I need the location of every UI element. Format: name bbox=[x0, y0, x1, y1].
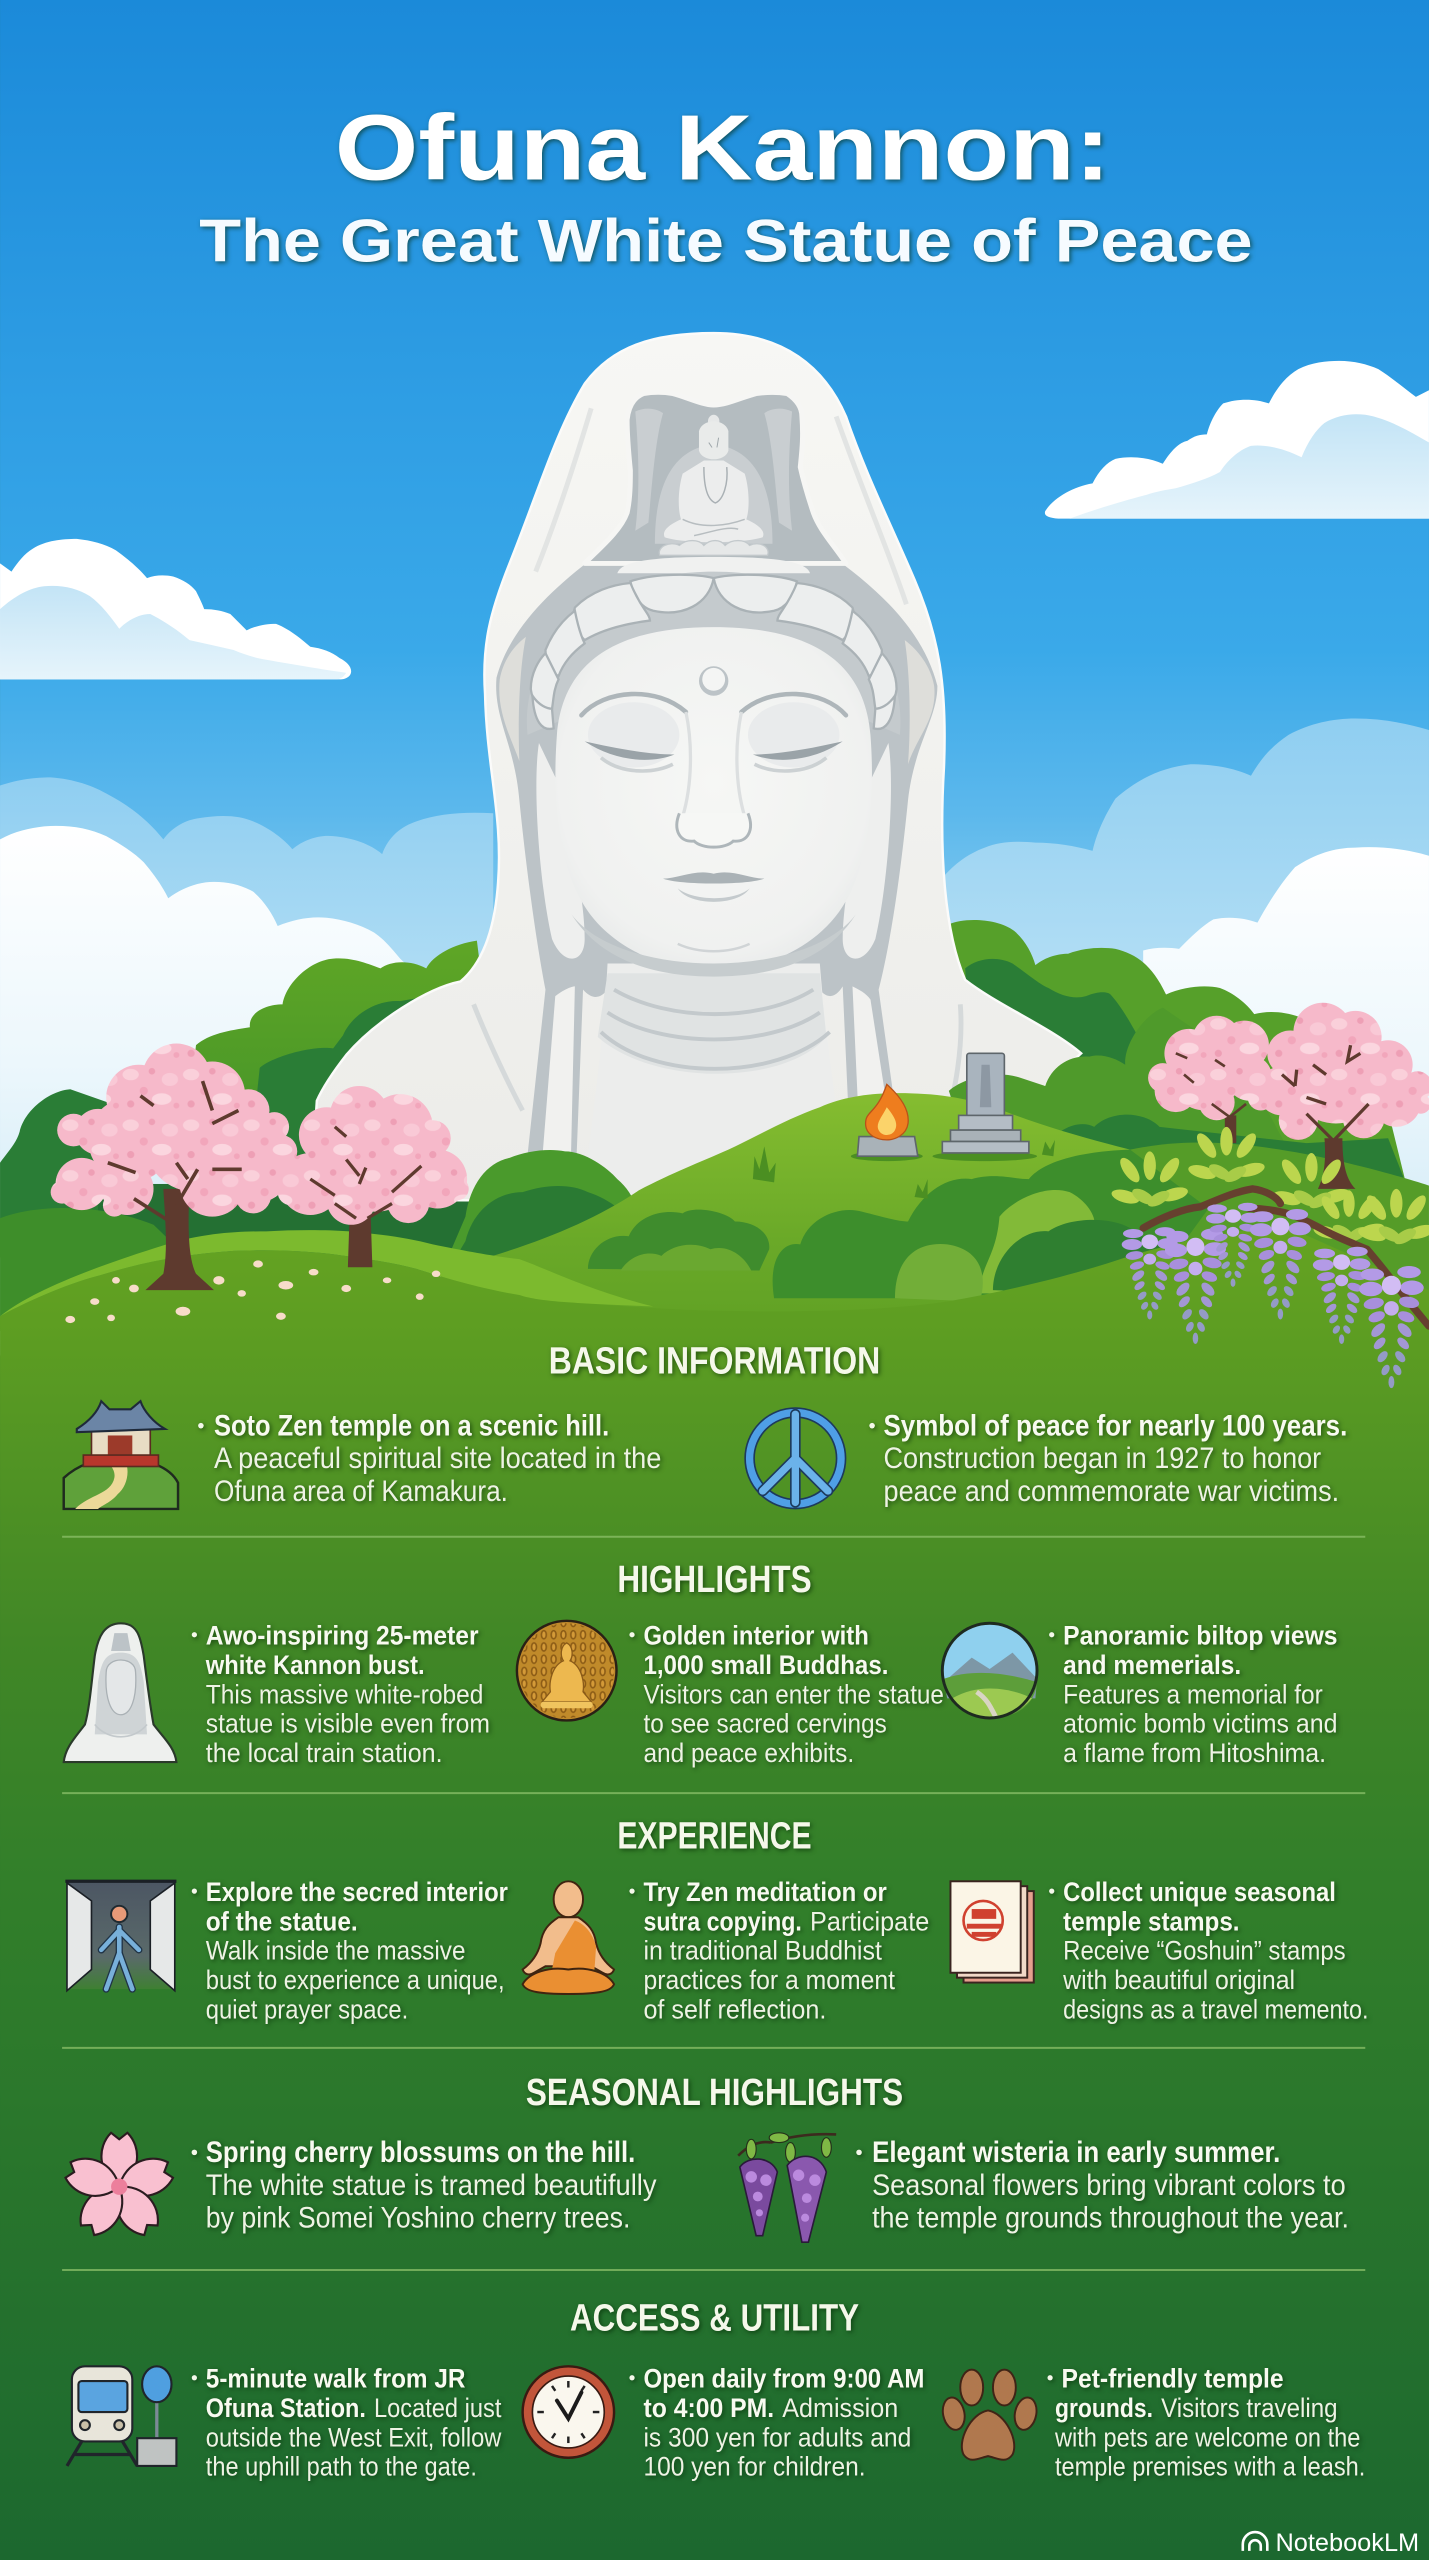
text: walk from station: Ofuna Station. bbox=[206, 2393, 366, 2423]
text: pet friendly: temple premises with a leash. bbox=[1055, 2452, 1365, 2482]
text: explore interior bbox=[192, 1877, 508, 2024]
text: cherry blossoms bbox=[192, 2136, 657, 2235]
front bushes right of statue bbox=[949, 1008, 1421, 1208]
text: opening hours: is 300 yen for adults and bbox=[643, 2422, 911, 2452]
bushes on hill bbox=[588, 1150, 1209, 1302]
inner robe panels bbox=[539, 986, 901, 1200]
lower eyelids bbox=[601, 758, 826, 771]
center hill bbox=[441, 1093, 1429, 1388]
branch bbox=[1143, 1189, 1429, 1326]
text: Soto Zen temple: Soto Zen temple on a scenic hill. bbox=[214, 1409, 609, 1442]
crown disc bbox=[617, 557, 810, 573]
right hill bbox=[1013, 1143, 1429, 1388]
icon: peace symbol bbox=[750, 1413, 841, 1504]
icon: clock bbox=[523, 2366, 614, 2458]
icon: temple on hill bbox=[64, 1401, 178, 1509]
heading: seasonal highlights: SEASONAL HIGHLIGHTS bbox=[526, 2071, 903, 2113]
text: walk from station bbox=[192, 2364, 502, 2482]
text: wisteria: the temple grounds throughout the year. bbox=[872, 2202, 1349, 2235]
text: opening hours: Open daily from 9:00 AM bbox=[643, 2364, 924, 2394]
neck and chest bbox=[581, 964, 849, 1200]
text: temple stamps: Receive “Goshuin” stamps bbox=[1063, 1936, 1346, 1966]
heading: basic information: BASIC INFORMATION bbox=[549, 1339, 880, 1381]
small seated Buddha bbox=[664, 415, 763, 542]
urna bbox=[699, 666, 728, 696]
niche behind small Buddha bbox=[585, 392, 846, 563]
heading: access and utility: ACCESS & UTILITY bbox=[570, 2296, 859, 2338]
text: pet friendly: with pets are welcome on the bbox=[1054, 2422, 1360, 2452]
text: pet friendly: grounds. bbox=[1055, 2393, 1153, 2423]
cherry tree: right large bbox=[1248, 1003, 1429, 1189]
text: walk from station: outside the West Exit, follow bbox=[206, 2422, 502, 2452]
NotebookLM logo: NotebookLM bbox=[1275, 2529, 1419, 2557]
text: Zen meditation: of self reflection. bbox=[643, 1994, 826, 2024]
cherry tree: left large bbox=[51, 1044, 297, 1290]
text: panoramic views: atomic bomb victims and bbox=[1063, 1709, 1338, 1739]
text: symbol of peace: peace and commemorate war victims. bbox=[884, 1475, 1339, 1508]
text: panoramic views bbox=[1049, 1621, 1338, 1768]
heading: experience: EXPERIENCE bbox=[617, 1815, 812, 1857]
text: golden interior: to see sacred cervings bbox=[643, 1709, 887, 1739]
text: explore interior: of the statue. bbox=[206, 1906, 358, 1936]
text: Zen meditation: practices for a moment bbox=[643, 1965, 895, 1995]
brows bbox=[581, 694, 846, 715]
hair lobes bbox=[531, 575, 897, 729]
bushes behind statue, right bbox=[949, 920, 1429, 1208]
memorial monument bbox=[933, 1053, 1037, 1161]
text: symbol of peace: Symbol of peace for nearly 100 years. bbox=[884, 1409, 1347, 1442]
sky background bbox=[0, 0, 1429, 1355]
text: explore interior: quiet prayer space. bbox=[206, 1994, 408, 2024]
face bbox=[555, 627, 872, 972]
cherry tree: right small bbox=[1148, 1016, 1272, 1143]
text: opening hours: to 4:00 PM. bbox=[643, 2393, 774, 2423]
title: Ofuna Kannon: bbox=[335, 96, 1111, 200]
cloud: top left bbox=[0, 539, 351, 679]
text: wisteria: Elegant wisteria in early summer. bbox=[872, 2136, 1280, 2169]
icon: statue interior doorway bbox=[65, 1881, 176, 1991]
text: wisteria bbox=[856, 2136, 1349, 2235]
cherry tree: left small bbox=[278, 1086, 469, 1267]
text: Soto Zen temple: Ofuna area of Kamakura. bbox=[214, 1475, 508, 1508]
title bbox=[199, 96, 1253, 274]
hair band bbox=[527, 572, 901, 735]
text: symbol of peace bbox=[869, 1409, 1347, 1508]
text: panoramic views: Panoramic biltop views bbox=[1063, 1621, 1338, 1651]
text: panoramic views: Features a memorial for bbox=[1063, 1679, 1323, 1709]
bushes behind statue, left bbox=[0, 941, 555, 1331]
text: symbol of peace: Construction began in 1927 to honor bbox=[884, 1442, 1321, 1475]
wisteria branch bbox=[1110, 1127, 1429, 1388]
text: walk from station: 5-minute walk from JR bbox=[206, 2364, 465, 2394]
text: temple stamps: Collect unique seasonal bbox=[1063, 1877, 1336, 1907]
text: awe-inspiring bust: the local train station. bbox=[206, 1738, 443, 1768]
closed eyes bbox=[585, 741, 843, 760]
beige hood panels bbox=[499, 637, 935, 764]
ears bbox=[536, 743, 891, 959]
text: walk from station: the uphill path to the gate. bbox=[206, 2452, 477, 2482]
text: explore interior: bust to experience a unique, bbox=[206, 1965, 505, 1995]
chin shadow bbox=[572, 915, 856, 977]
cloud: white right front bbox=[1143, 847, 1429, 1257]
text: Soto Zen temple: A peaceful spiritual site located in the bbox=[214, 1442, 661, 1475]
statue: Kannon bust bbox=[310, 333, 1081, 1200]
text: golden interior: and peace exhibits. bbox=[643, 1738, 854, 1768]
icon: panoramic view bbox=[942, 1623, 1037, 1718]
text: temple stamps bbox=[1049, 1877, 1369, 2024]
bushes in front of statue base bbox=[441, 1150, 637, 1282]
eye sockets bbox=[588, 702, 839, 768]
mouth bbox=[663, 872, 764, 902]
text: Soto Zen temple bbox=[198, 1409, 661, 1508]
text: panoramic views: a flame from Hitoshima. bbox=[1063, 1738, 1326, 1768]
hood folds bbox=[474, 408, 961, 1127]
text: golden interior: Visitors can enter the statue bbox=[643, 1679, 944, 1709]
text: pet friendly bbox=[1047, 2364, 1365, 2482]
text: golden interior: Golden interior with bbox=[643, 1621, 869, 1651]
chest shadow bbox=[598, 973, 826, 1074]
text: awe-inspiring bust: This massive white-robed bbox=[206, 1679, 483, 1709]
text: awe-inspiring bust: white Kannon bust. bbox=[205, 1650, 425, 1680]
cloud: white left front bbox=[0, 826, 490, 1257]
text: Zen meditation: Participate bbox=[810, 1906, 929, 1936]
lotus base bbox=[659, 541, 768, 555]
neck folds bbox=[601, 990, 830, 1069]
icon: meditating monk bbox=[523, 1881, 614, 1994]
icon: paw print bbox=[940, 2370, 1039, 2460]
cloud: pale left back bbox=[0, 777, 493, 1110]
icon: wisteria bbox=[738, 2133, 836, 2242]
icon: cherry blossom bbox=[62, 2133, 176, 2241]
head opening shadow bbox=[496, 552, 937, 1200]
text: awe-inspiring bust bbox=[192, 1621, 490, 1768]
text: pet friendly: Visitors traveling bbox=[1161, 2393, 1338, 2423]
text: opening hours bbox=[629, 2364, 924, 2482]
text: Zen meditation: Try Zen meditation or bbox=[643, 1877, 887, 1907]
text: golden interior bbox=[629, 1621, 944, 1768]
heading: highlights: HIGHLIGHTS bbox=[617, 1558, 812, 1600]
text: cherry blossoms: The white statue is tramed beautifully bbox=[206, 2169, 657, 2202]
text: temple stamps: with beautiful original bbox=[1062, 1965, 1295, 1995]
nose bbox=[677, 813, 751, 847]
title: The Great White Statue of Peace bbox=[199, 206, 1253, 274]
foreground ground and text panel bbox=[0, 1228, 1429, 2560]
nose bridge bbox=[683, 712, 745, 817]
light hill band bbox=[0, 1230, 653, 1316]
niche light panels bbox=[635, 409, 792, 544]
leaves bbox=[1110, 1127, 1429, 1247]
text: awe-inspiring bust: statue is visible even from bbox=[206, 1709, 490, 1739]
icon: temple stamps bbox=[950, 1881, 1034, 1983]
text: Zen meditation: in traditional Buddhist bbox=[643, 1936, 882, 1966]
text: wisteria: Seasonal flowers bring vibrant colors to bbox=[872, 2169, 1346, 2202]
text: explore interior: Explore the secred interior bbox=[206, 1877, 508, 1907]
text: opening hours: 100 yen for children. bbox=[643, 2452, 866, 2482]
text: panoramic views: and memerials. bbox=[1063, 1650, 1241, 1680]
text: pet friendly: Pet-friendly temple bbox=[1062, 2364, 1284, 2394]
text: walk from station: Located just bbox=[374, 2393, 502, 2423]
cloud: pale right back bbox=[939, 719, 1429, 1110]
text: temple stamps: designs as a travel memento. bbox=[1063, 1994, 1369, 2024]
icon: golden interior bbox=[517, 1621, 617, 1720]
text: Zen meditation: sutra copying. bbox=[643, 1906, 802, 1936]
text: awe-inspiring bust: Awo-inspiring 25-meter bbox=[206, 1621, 479, 1651]
fallen petals bbox=[65, 1260, 440, 1323]
text: cherry blossoms: Spring cherry blossums on the hill. bbox=[206, 2136, 635, 2169]
divider lines bbox=[62, 1537, 1365, 2270]
icon: train and station sign bbox=[67, 2366, 176, 2466]
memorial flame bbox=[851, 1084, 923, 1161]
text: Zen meditation bbox=[629, 1877, 929, 2024]
statue hood and robe bbox=[310, 333, 1081, 1200]
grass tufts bbox=[753, 1140, 1055, 1199]
flower clusters bbox=[1122, 1203, 1424, 1388]
text: opening hours: Admission bbox=[782, 2393, 898, 2423]
text: temple stamps: temple stamps. bbox=[1063, 1906, 1240, 1936]
text: explore interior: Walk inside the massive bbox=[206, 1936, 465, 1966]
text: cherry blossoms: by pink Somei Yoshino cherry trees. bbox=[206, 2202, 630, 2235]
cloud: top right bbox=[1045, 361, 1429, 519]
text: golden interior: 1,000 small Buddhas. bbox=[643, 1650, 888, 1680]
icon: white Kannon bust bbox=[64, 1623, 176, 1762]
